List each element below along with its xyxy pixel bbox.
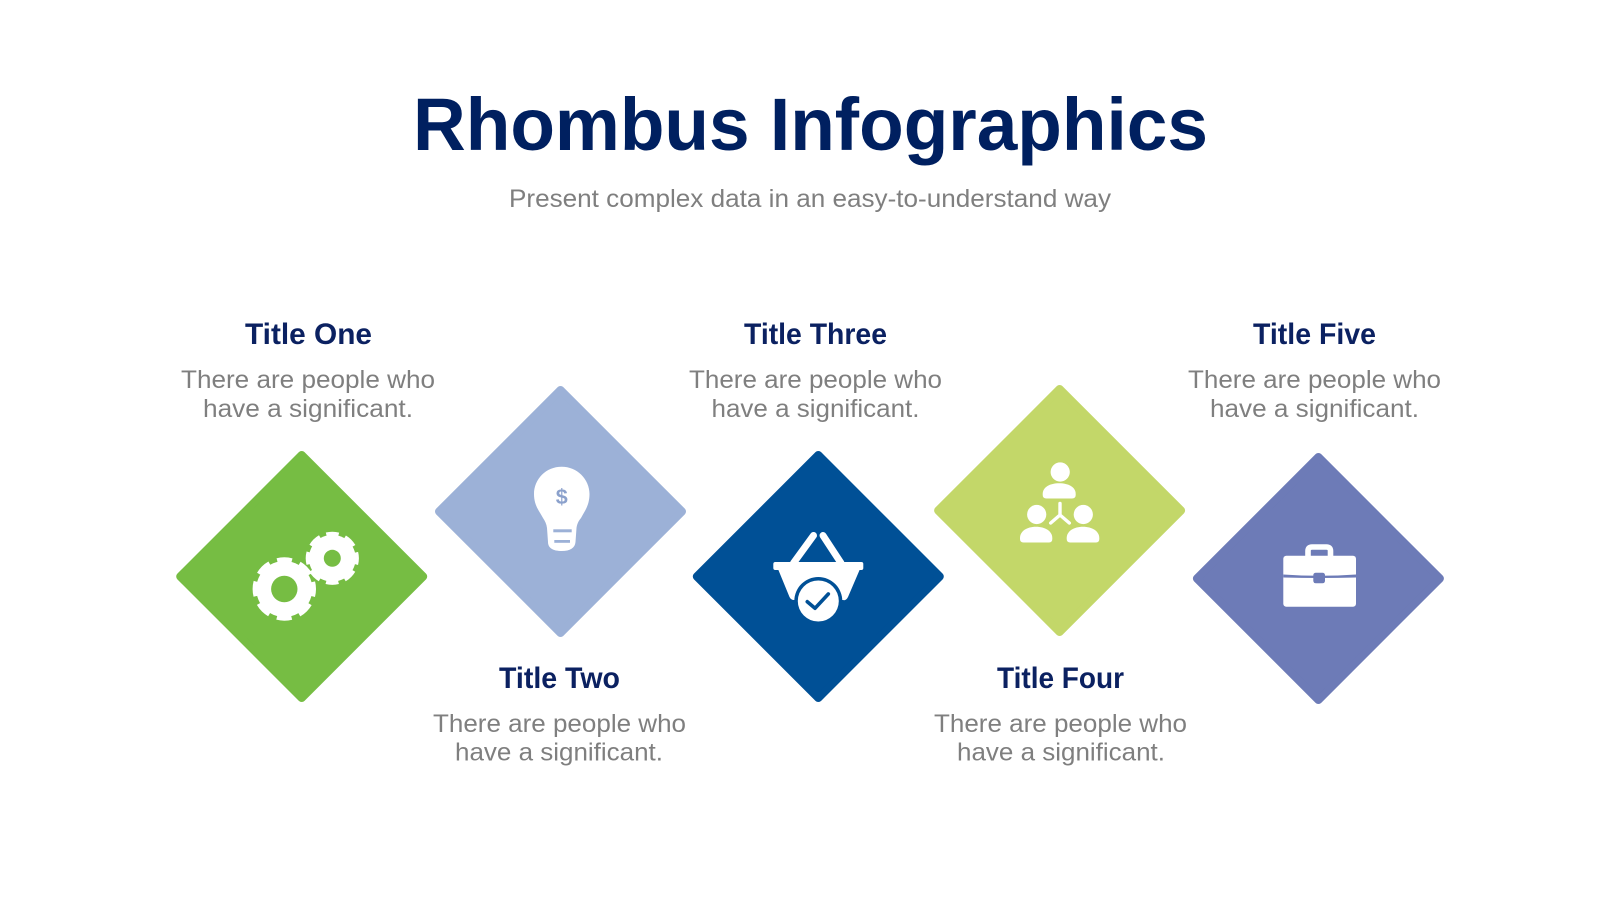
text block: title four description: have a significant. — [957, 738, 1165, 766]
icon: briefcase — [1283, 547, 1356, 607]
text block: title five description: There are people who — [1188, 366, 1441, 394]
text block: title one description: There are people who — [181, 366, 435, 394]
panel: title four — [934, 389, 1187, 766]
rhombus: lime — [938, 389, 1181, 632]
text block: title one description: have a significant. — [203, 395, 413, 423]
text block: title one description — [181, 366, 435, 423]
icon: light bulb with dollar — [534, 467, 590, 551]
panel: title one — [180, 318, 435, 698]
icon: gears — [255, 534, 357, 618]
text block: title two description: have a significant. — [455, 738, 663, 766]
panel: title two — [433, 390, 686, 766]
rhombus: light blue — [439, 390, 682, 633]
rhombus: navy — [697, 455, 940, 698]
heading: title five: Title Five — [1253, 318, 1376, 351]
text block: title three description: There are people who — [689, 366, 942, 394]
icon: people hierarchy — [1020, 462, 1099, 542]
text block: title three description — [689, 366, 942, 423]
heading: title four: Title Four — [997, 662, 1124, 695]
heading: title one: Title One — [245, 318, 372, 351]
subtitle: Present complex data in an easy-to-understand way — [509, 185, 1112, 213]
rhombus: green — [180, 455, 423, 698]
text block: title five description — [1188, 366, 1441, 423]
text block: title two description: There are people who — [433, 710, 686, 738]
rhombus: purple — [1197, 457, 1440, 700]
heading: title two: Title Two — [499, 662, 620, 695]
panel: title three — [689, 318, 942, 698]
text block: title four description: There are people who — [934, 710, 1187, 738]
icon: light bulb with dollar: $ — [556, 485, 568, 509]
title: Rhombus Infographics — [413, 83, 1208, 166]
panel: title five — [1188, 318, 1441, 700]
text block: title four description — [934, 710, 1187, 766]
icon: basket with check — [773, 536, 863, 625]
text block: title three description: have a significant. — [712, 395, 920, 423]
text block: title two description — [433, 710, 686, 766]
text block: title five description: have a significant. — [1210, 395, 1419, 423]
heading: title three: Title Three — [744, 318, 887, 351]
